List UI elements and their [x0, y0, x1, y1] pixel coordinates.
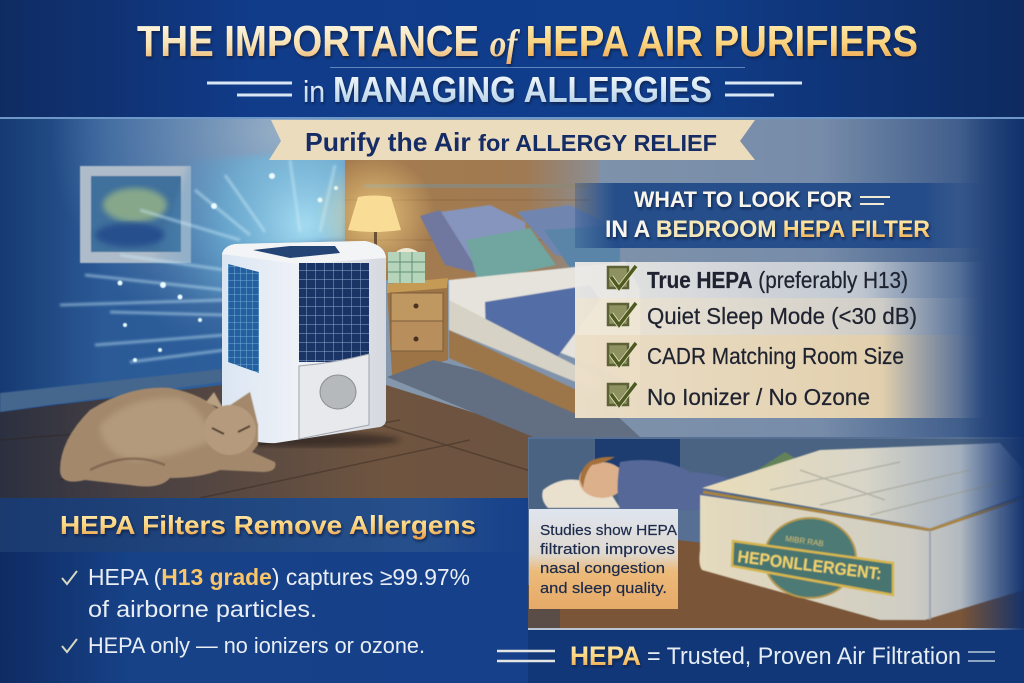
mattress badge [732, 518, 893, 598]
bed headboard [345, 160, 600, 280]
checklist item 1: True HEPA (preferably H13) [647, 267, 908, 293]
air purifier [220, 241, 400, 447]
checklist item 2 [575, 298, 985, 335]
front grille [299, 263, 369, 362]
checklist item 1 [575, 262, 985, 298]
floor [0, 372, 640, 500]
bullet 1: of airborne particles. [88, 596, 317, 622]
wall art [80, 166, 191, 263]
nightstand with tissue box [387, 248, 448, 375]
left panel heading [0, 498, 528, 552]
left info panel [0, 498, 528, 683]
panel heading: IN A BEDROOM HEPA FILTER [605, 216, 930, 243]
checklist item 3: CADR Matching Room Size [647, 343, 904, 369]
study callout: filtration improves [540, 541, 675, 558]
checklist item 3 [575, 335, 985, 375]
left wall [0, 119, 345, 404]
mattress [699, 443, 1024, 620]
bed [420, 205, 640, 418]
side grille [228, 264, 259, 373]
study callout [529, 509, 678, 609]
mattress badge: HEPONLLERGENT: [737, 547, 883, 584]
bullet 1: HEPA (H13 grade) captures ≥99.97% [88, 564, 470, 590]
checklist item 2: Quiet Sleep Mode (<30 dB) [647, 303, 917, 329]
left panel heading: HEPA Filters Remove Allergens [60, 510, 476, 540]
checklist item 4 [575, 375, 985, 418]
study callout: nasal congestion [540, 560, 665, 577]
rug [387, 360, 640, 448]
mattress badge: MIBR RAB [785, 534, 824, 548]
banner [269, 120, 755, 160]
purifier top panel [253, 246, 340, 258]
cat [60, 388, 275, 486]
room scene [0, 119, 1024, 500]
panel heading: WHAT TO LOOK FOR [634, 187, 852, 212]
sleep and mattress panel [528, 437, 1024, 630]
study callout: Studies show HEPA [540, 522, 677, 539]
sleeping person [542, 452, 795, 510]
header band [0, 0, 1024, 119]
panel heading [575, 183, 985, 248]
right wall [345, 119, 1024, 439]
panel: what to look for [575, 183, 985, 418]
baseboard [0, 369, 222, 412]
checklist item 4: No Ionizer / No Ozone [647, 384, 870, 410]
banner: Purify the Air for ALLERGY RELIEF [305, 127, 717, 157]
study callout: and sleep quality. [540, 580, 667, 597]
bullet 1 [62, 564, 470, 622]
purifier dial [320, 375, 356, 409]
footer tagline: HEPA [570, 641, 641, 671]
air burst [60, 150, 345, 362]
footer tagline: = Trusted, Proven Air Filtration [647, 643, 961, 670]
title line 1: THE IMPORTANCE of HEPA AIR PURIFIERS [137, 17, 918, 66]
title line 2: in MANAGING ALLERGIES [303, 69, 712, 110]
lamp [315, 155, 435, 275]
right edge shading [960, 119, 1024, 630]
bullet 2: HEPA only — no ionizers or ozone. [88, 633, 425, 658]
footer tagline [497, 630, 1024, 683]
